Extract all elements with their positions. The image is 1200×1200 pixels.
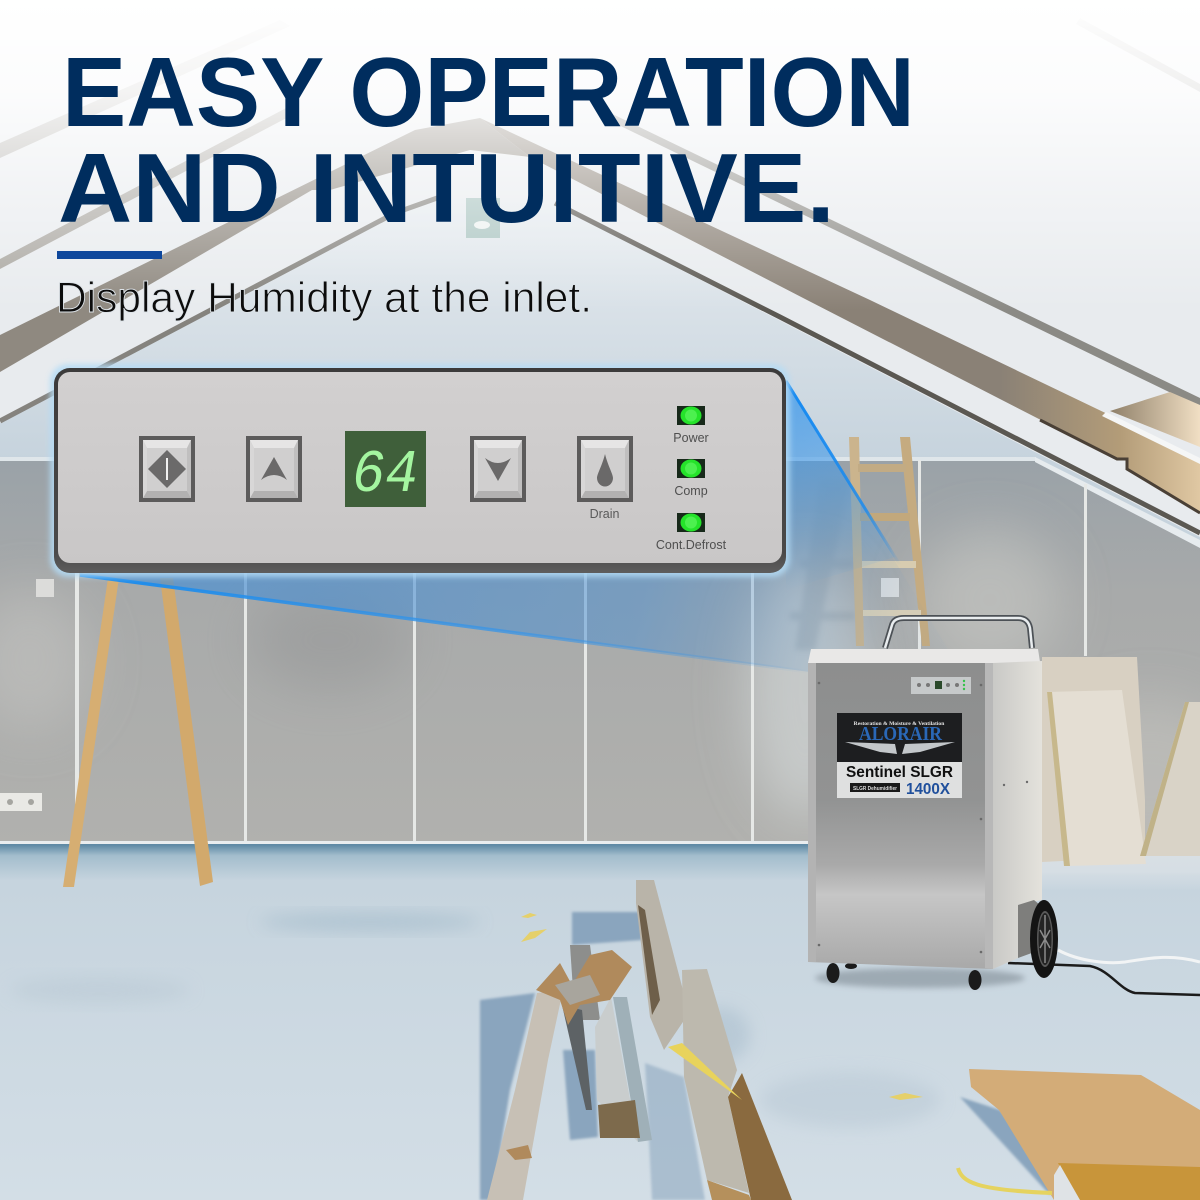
up button xyxy=(246,436,302,502)
drain button xyxy=(577,436,633,502)
front casters xyxy=(826,963,982,990)
debris: torn brown edge xyxy=(728,1073,792,1200)
power button xyxy=(139,436,195,502)
debris: right plank xyxy=(682,969,749,1193)
zoomed control panel xyxy=(50,364,790,577)
panel seams xyxy=(75,460,1087,843)
subtitle: Display Humidity at the inlet. xyxy=(56,274,592,322)
cables xyxy=(1008,950,1200,995)
debris: scrap at stud foot xyxy=(598,1100,640,1138)
beam step trim xyxy=(1040,420,1200,513)
front edge strips xyxy=(808,663,993,969)
title: AND INTUITIVE. xyxy=(58,133,835,243)
wheel recess xyxy=(1018,900,1040,958)
big wheel xyxy=(1030,900,1058,978)
brand label: Restoration & Moisture & Ventilation xyxy=(854,721,945,727)
top lid xyxy=(808,649,1040,664)
panel frame xyxy=(54,368,786,573)
debris: yellow insulation xyxy=(668,1043,742,1100)
side panel xyxy=(993,661,1042,969)
top right faint beam xyxy=(1076,18,1200,92)
wide beam left xyxy=(0,118,530,372)
defrost LED xyxy=(677,513,705,532)
dehumidifier unit xyxy=(808,618,1058,990)
smoke detector xyxy=(466,198,500,238)
debris: metal studs xyxy=(562,945,652,1142)
power LED xyxy=(677,406,705,425)
brand label: 1400X xyxy=(906,781,951,798)
floor xyxy=(0,843,1200,1200)
brand label: SLGR Dehumidifier xyxy=(853,786,898,792)
floor shadow xyxy=(815,968,1025,988)
yellow tape xyxy=(958,1168,1052,1193)
mini control panel xyxy=(911,677,971,694)
skylight frame xyxy=(1102,412,1200,464)
debris: tall gypsum board xyxy=(636,880,689,1050)
humidity display: 64 xyxy=(352,442,418,510)
white wrap at box xyxy=(1054,1165,1080,1200)
gable trim left xyxy=(0,197,440,421)
accent rule xyxy=(57,251,162,259)
floor marks xyxy=(10,912,940,1128)
brand label xyxy=(837,713,962,798)
floor yellow flecks xyxy=(521,913,923,1100)
power label: Power xyxy=(673,431,709,445)
down button xyxy=(470,436,526,502)
drywall boards xyxy=(1042,657,1200,866)
debris shadows on floor xyxy=(480,912,1055,1200)
defrost label: Cont.Defrost xyxy=(656,538,727,552)
panel glow xyxy=(50,364,790,577)
side wall panels xyxy=(0,460,1200,845)
title: EASY OPERATION xyxy=(62,37,915,147)
skirting line xyxy=(0,841,808,844)
debris: left plank xyxy=(487,990,563,1200)
panel face xyxy=(58,372,782,563)
wall outlets xyxy=(0,793,42,811)
front panel xyxy=(808,663,993,969)
chrome handle xyxy=(885,618,1032,648)
large cardboard sheet xyxy=(969,1069,1200,1200)
white fade behind title xyxy=(0,0,1200,310)
fasteners xyxy=(818,682,1028,953)
wall slope trim right xyxy=(1035,457,1200,548)
wall switch right xyxy=(881,578,899,597)
wide beam right xyxy=(480,118,1200,513)
right ladder xyxy=(849,437,930,646)
comp LED xyxy=(677,459,705,478)
brand label: ALORAIR xyxy=(859,723,942,745)
skylight opening xyxy=(1110,392,1200,447)
upper ceiling beam right xyxy=(600,108,1200,407)
ceiling xyxy=(0,0,1200,560)
top left faint beam xyxy=(0,20,290,158)
comp label: Comp xyxy=(674,484,708,498)
wall top trim xyxy=(0,457,1036,461)
callout cone from unit display to zoomed panel xyxy=(80,380,975,694)
wall switch left xyxy=(36,579,54,597)
upper ceiling beam left xyxy=(0,106,296,269)
drain label: Drain xyxy=(590,507,619,521)
debris: lower wood scrap xyxy=(707,1180,751,1200)
floor right area xyxy=(808,843,1200,890)
debris: torn cardboard xyxy=(536,950,632,1025)
brand label: Sentinel SLGR xyxy=(846,764,953,781)
debris: small cardboard chip xyxy=(506,1145,532,1160)
left ladder xyxy=(63,578,213,887)
wall haze xyxy=(0,530,1200,860)
title xyxy=(58,37,915,243)
right ladder shadow xyxy=(790,480,855,650)
gable trim right xyxy=(555,203,1200,533)
gable end wall xyxy=(0,198,1200,845)
cardboard box corner xyxy=(1058,1163,1200,1200)
